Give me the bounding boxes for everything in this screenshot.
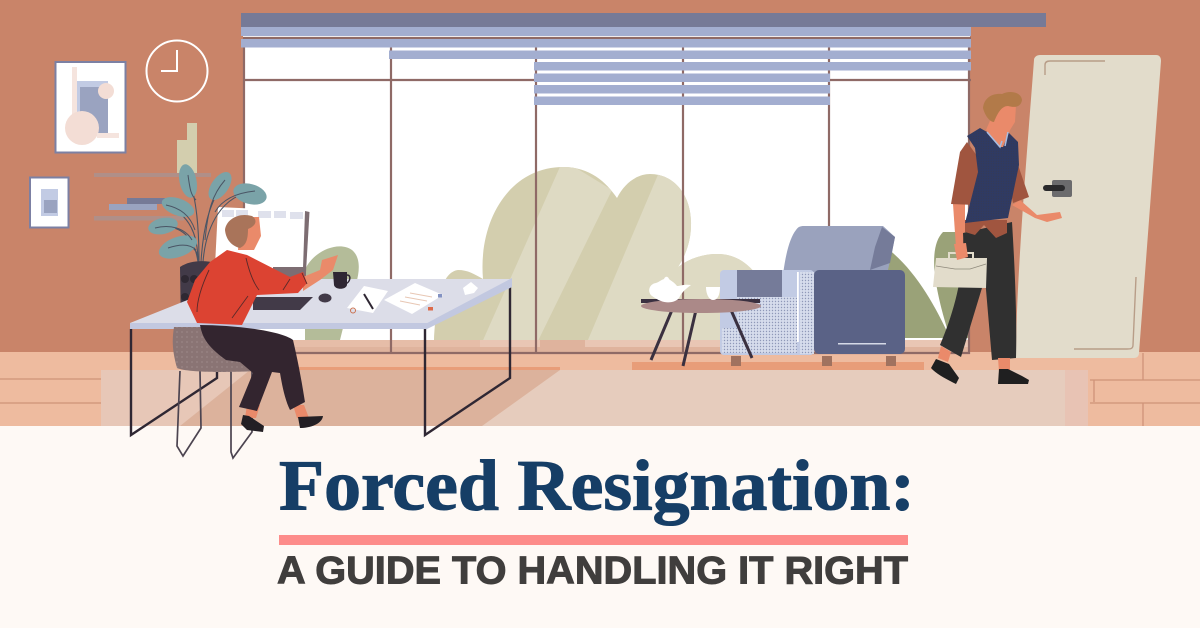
shirt	[187, 250, 307, 325]
desk items	[253, 272, 478, 314]
window	[243, 36, 971, 354]
chair	[173, 327, 258, 458]
hair	[225, 215, 255, 248]
shirt tail	[965, 220, 1007, 238]
shoes	[241, 415, 323, 432]
tiled floor	[0, 352, 1200, 426]
window blinds	[241, 13, 1046, 105]
hand	[954, 243, 968, 260]
rug and floor light	[101, 362, 1088, 426]
door	[1016, 55, 1161, 358]
seated worker	[187, 215, 338, 432]
armchair	[720, 226, 905, 366]
large wall picture	[56, 62, 126, 152]
collar	[987, 132, 1008, 147]
wall clock	[146, 40, 208, 102]
window frame	[243, 38, 971, 354]
teapot	[649, 277, 691, 302]
ankles	[938, 346, 1010, 372]
teacup	[706, 287, 720, 300]
door handle	[1052, 180, 1072, 197]
small wall picture	[30, 178, 68, 228]
arms	[1012, 200, 1062, 222]
sleeves	[951, 142, 980, 205]
skin	[303, 255, 338, 291]
subtitle: A GUIDE TO HANDLING IT RIGHT	[277, 550, 908, 592]
wall shelves	[94, 123, 211, 220]
coffee table with tea set	[641, 277, 761, 366]
trousers	[940, 222, 1016, 360]
neck and face	[986, 116, 1012, 147]
wall	[0, 0, 1200, 352]
briefcase	[949, 253, 973, 259]
shoes	[931, 359, 959, 384]
trousers	[200, 325, 305, 411]
title: Forced Resignation:	[279, 446, 915, 526]
vest	[965, 128, 1019, 223]
potted plant	[147, 163, 269, 332]
monitor	[215, 207, 310, 280]
hair	[983, 92, 1022, 122]
departing worker	[931, 92, 1062, 384]
window sill	[243, 340, 970, 353]
desk	[130, 278, 512, 435]
plants outside the window	[305, 160, 970, 347]
bottom panel	[0, 426, 1200, 628]
title divider	[279, 535, 908, 545]
